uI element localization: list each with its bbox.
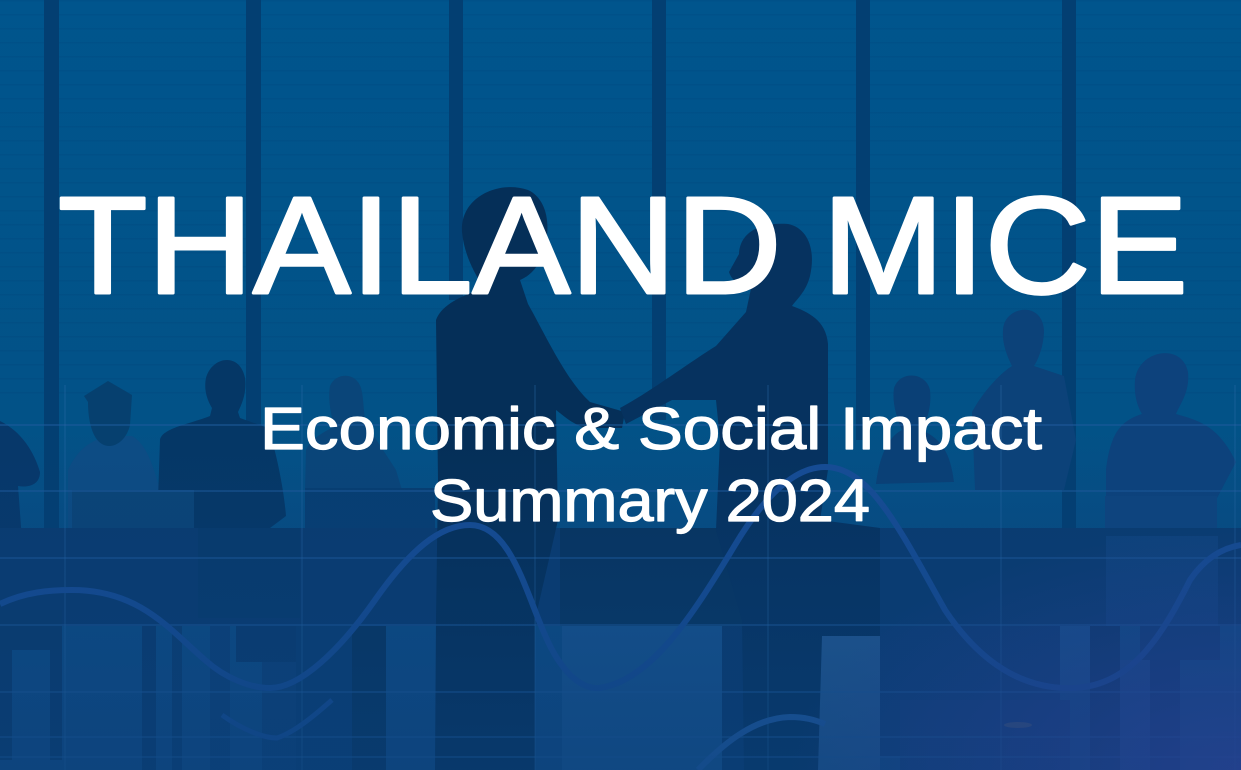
horizontal grid lines: [0, 425, 1241, 757]
subtitle line 2: Summary 2024: [430, 468, 870, 534]
conference table: [0, 528, 1241, 626]
handshaking businessman right: [620, 224, 880, 770]
person: far left: [0, 421, 40, 545]
background seated and standing people: [0, 310, 1236, 545]
person: woman standing far right: [1106, 353, 1236, 540]
line chart wave: [0, 467, 1241, 688]
person: woman with long hair: [305, 376, 402, 490]
lower wave fragment right: [698, 717, 825, 770]
chairs and table legs: [0, 610, 1241, 770]
vertical grid lines: [65, 385, 1235, 770]
lower wave fragment left: [222, 700, 332, 738]
person: keffiyeh: [68, 381, 160, 540]
laptops and table surface: [72, 488, 1217, 540]
bottom tint: [0, 440, 1241, 770]
person: seated right: [876, 375, 954, 484]
subtitle line 1: Economic & Social Impact: [260, 396, 1042, 462]
person: standing right: [972, 310, 1076, 490]
person: standing man in suit: [158, 360, 286, 535]
title: THAILAND MICE: [58, 169, 1188, 323]
handshaking businessman left: [435, 187, 625, 770]
window frame columns: [44, 0, 1076, 540]
